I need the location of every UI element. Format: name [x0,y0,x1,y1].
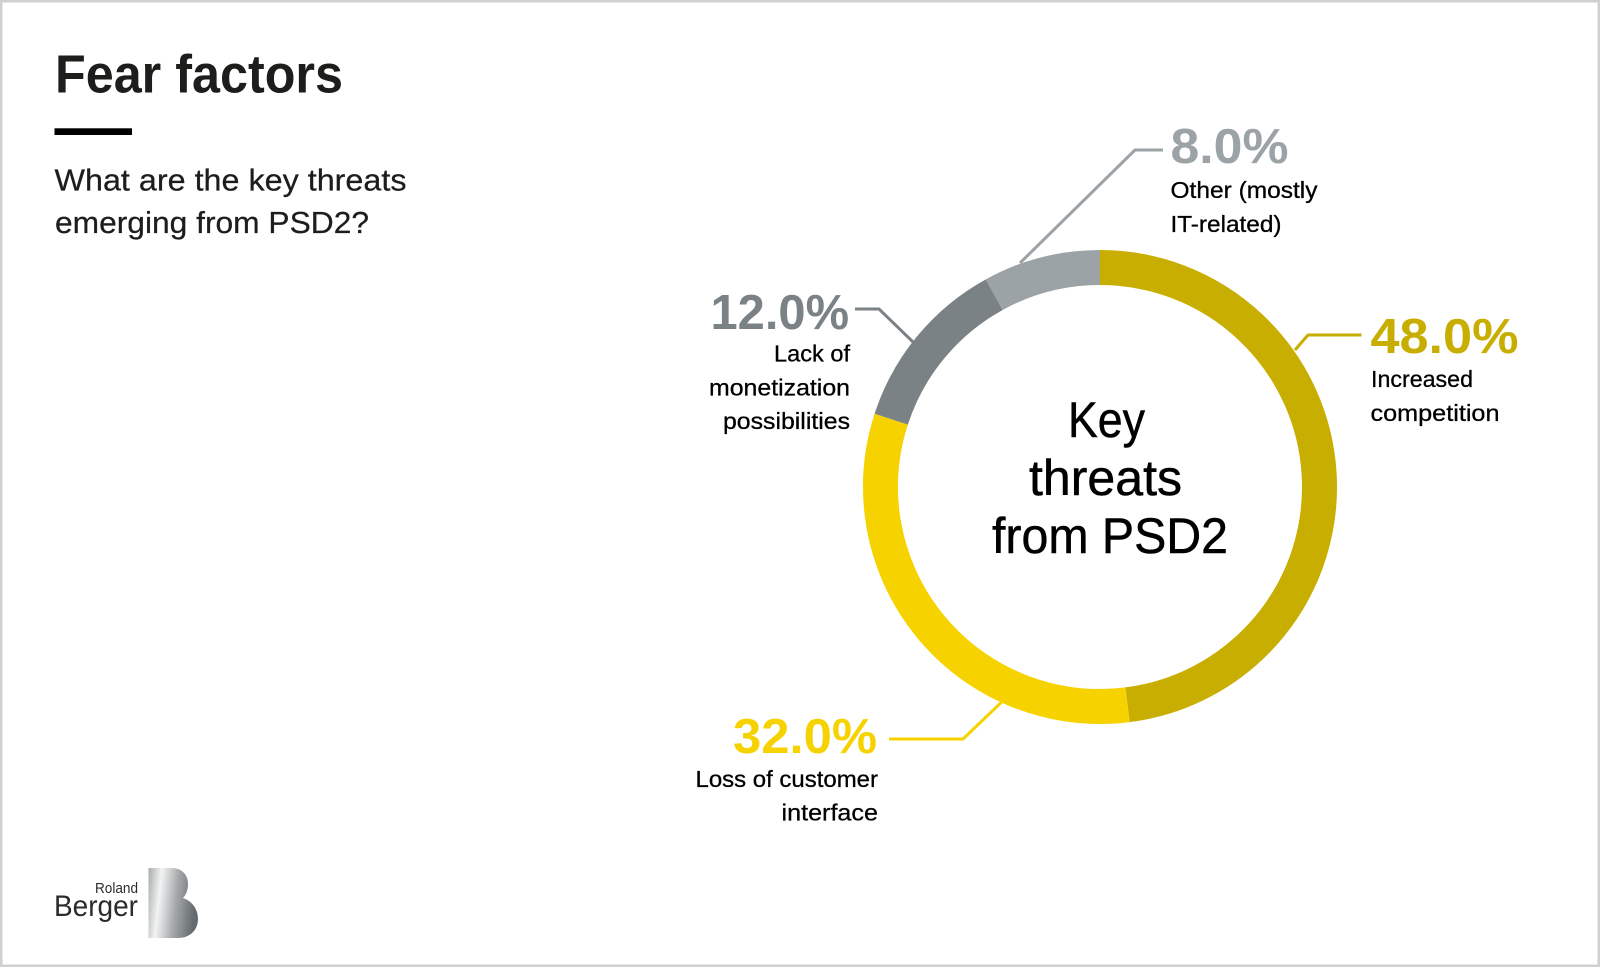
logo wordmark: Roland [95,880,138,897]
arc: 12 percent [891,295,994,419]
value 48%: 48.0% [1370,310,1518,364]
logo: Roland Berger [54,868,198,938]
description 8%: Other (mostly [1170,177,1318,203]
callout: lack of monetization 12% [709,286,913,434]
arc: 32 percent [880,419,1128,707]
centre label: threats [1029,450,1182,506]
callout: loss of customer interface 32% [696,702,1002,826]
centre label: from PSD2 [992,508,1228,564]
subtitle: What are the key threats [54,162,406,198]
title rule [54,128,132,135]
arc: 48 percent [1100,268,1320,705]
leader line 32% [889,702,1002,739]
centre label [992,392,1228,564]
donut chart [880,268,1320,707]
leader line 48% [1295,335,1362,350]
value 8%: 8.0% [1170,120,1288,174]
arc: 8 percent [994,268,1100,295]
logo wordmark: Berger [54,890,138,923]
description 48% [1370,366,1500,426]
subtitle: emerging from PSD2? [55,205,369,240]
description 12%: monetization [709,375,850,401]
description 8%: IT-related) [1170,211,1282,237]
description 8% [1170,177,1318,237]
leader line 12% [855,309,913,342]
centre label: Key [1068,392,1145,448]
description 48%: Increased [1371,366,1473,392]
description 12% [709,341,850,434]
value 32%: 32.0% [733,710,877,764]
description 12%: Lack of [774,341,850,367]
subtitle [54,162,406,240]
callout: increased competition 48% [1295,310,1518,426]
logo B mark [148,868,198,938]
description 32% [696,766,878,826]
title: Fear factors [55,44,343,104]
description 32%: Loss of customer [696,766,878,792]
description 48%: competition [1370,400,1500,426]
description 12%: possibilities [723,408,850,434]
leader line 8% [1020,150,1163,263]
value 12%: 12.0% [710,286,849,340]
description 32%: interface [782,800,878,826]
callout: other 8% [1020,120,1318,263]
